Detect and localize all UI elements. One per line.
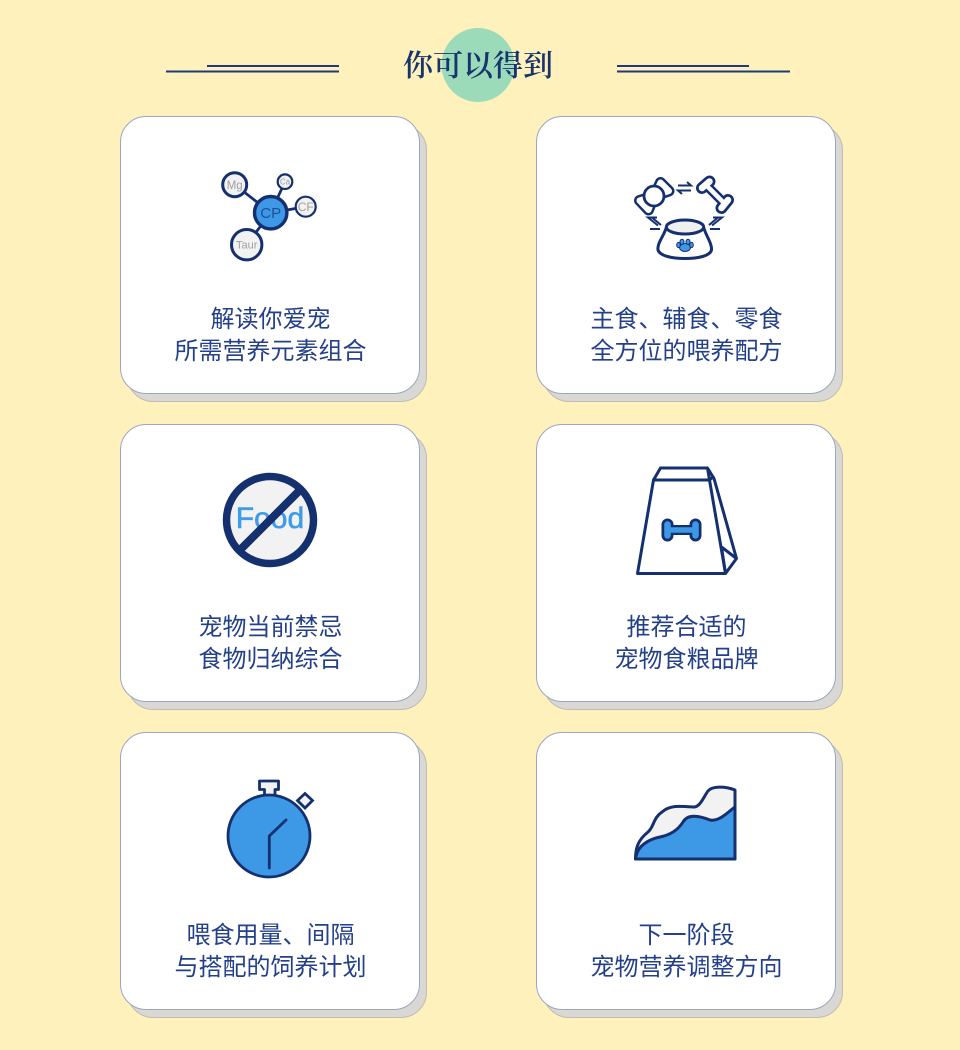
icon: molecule: CP [260, 205, 281, 222]
caption [590, 306, 782, 365]
caption: 解读你爱宠 [210, 306, 330, 333]
icon: candy, bone and bowl [634, 176, 734, 260]
icon: stopwatch [226, 780, 314, 878]
panel: nutrition elements [120, 116, 427, 402]
caption [174, 922, 366, 981]
header [166, 28, 790, 102]
panel: feeding schedule [120, 732, 427, 1018]
caption: 推荐合适的 [626, 614, 746, 641]
title: 你可以得到 [403, 41, 553, 85]
caption: 全方位的喂养配方 [590, 338, 782, 365]
icon: hill chart [634, 786, 736, 860]
icon: molecule [221, 171, 317, 262]
panel: feeding plan [536, 116, 843, 402]
caption: 所需营养元素组合 [174, 338, 366, 365]
icon: no food sign [222, 472, 318, 568]
caption: 主食、辅食、零食 [590, 306, 782, 333]
caption: 宠物营养调整方向 [590, 954, 782, 981]
caption: 下一阶段 [638, 922, 734, 949]
panel: food brands [536, 424, 843, 710]
icon: pet food bag [636, 466, 738, 575]
caption: 喂食用量、间隔 [186, 922, 354, 949]
icon: molecule: Ca [280, 178, 291, 187]
icon: molecule: Taur [236, 240, 258, 252]
caption: 与搭配的饲养计划 [174, 954, 366, 981]
caption [174, 306, 366, 365]
caption [198, 614, 342, 673]
caption [614, 614, 758, 673]
caption: 宠物当前禁忌 [198, 614, 342, 641]
icon: molecule: CF [298, 200, 314, 214]
panel: forbidden foods [120, 424, 427, 710]
icon: molecule: Mg [227, 180, 243, 192]
caption: 食物归纳综合 [198, 646, 342, 673]
caption [590, 922, 782, 981]
caption: 宠物食粮品牌 [614, 646, 758, 673]
panel: next stage [536, 732, 843, 1018]
icon: no food sign: Food [236, 502, 304, 535]
header decoration: green circle and rules [166, 28, 790, 102]
